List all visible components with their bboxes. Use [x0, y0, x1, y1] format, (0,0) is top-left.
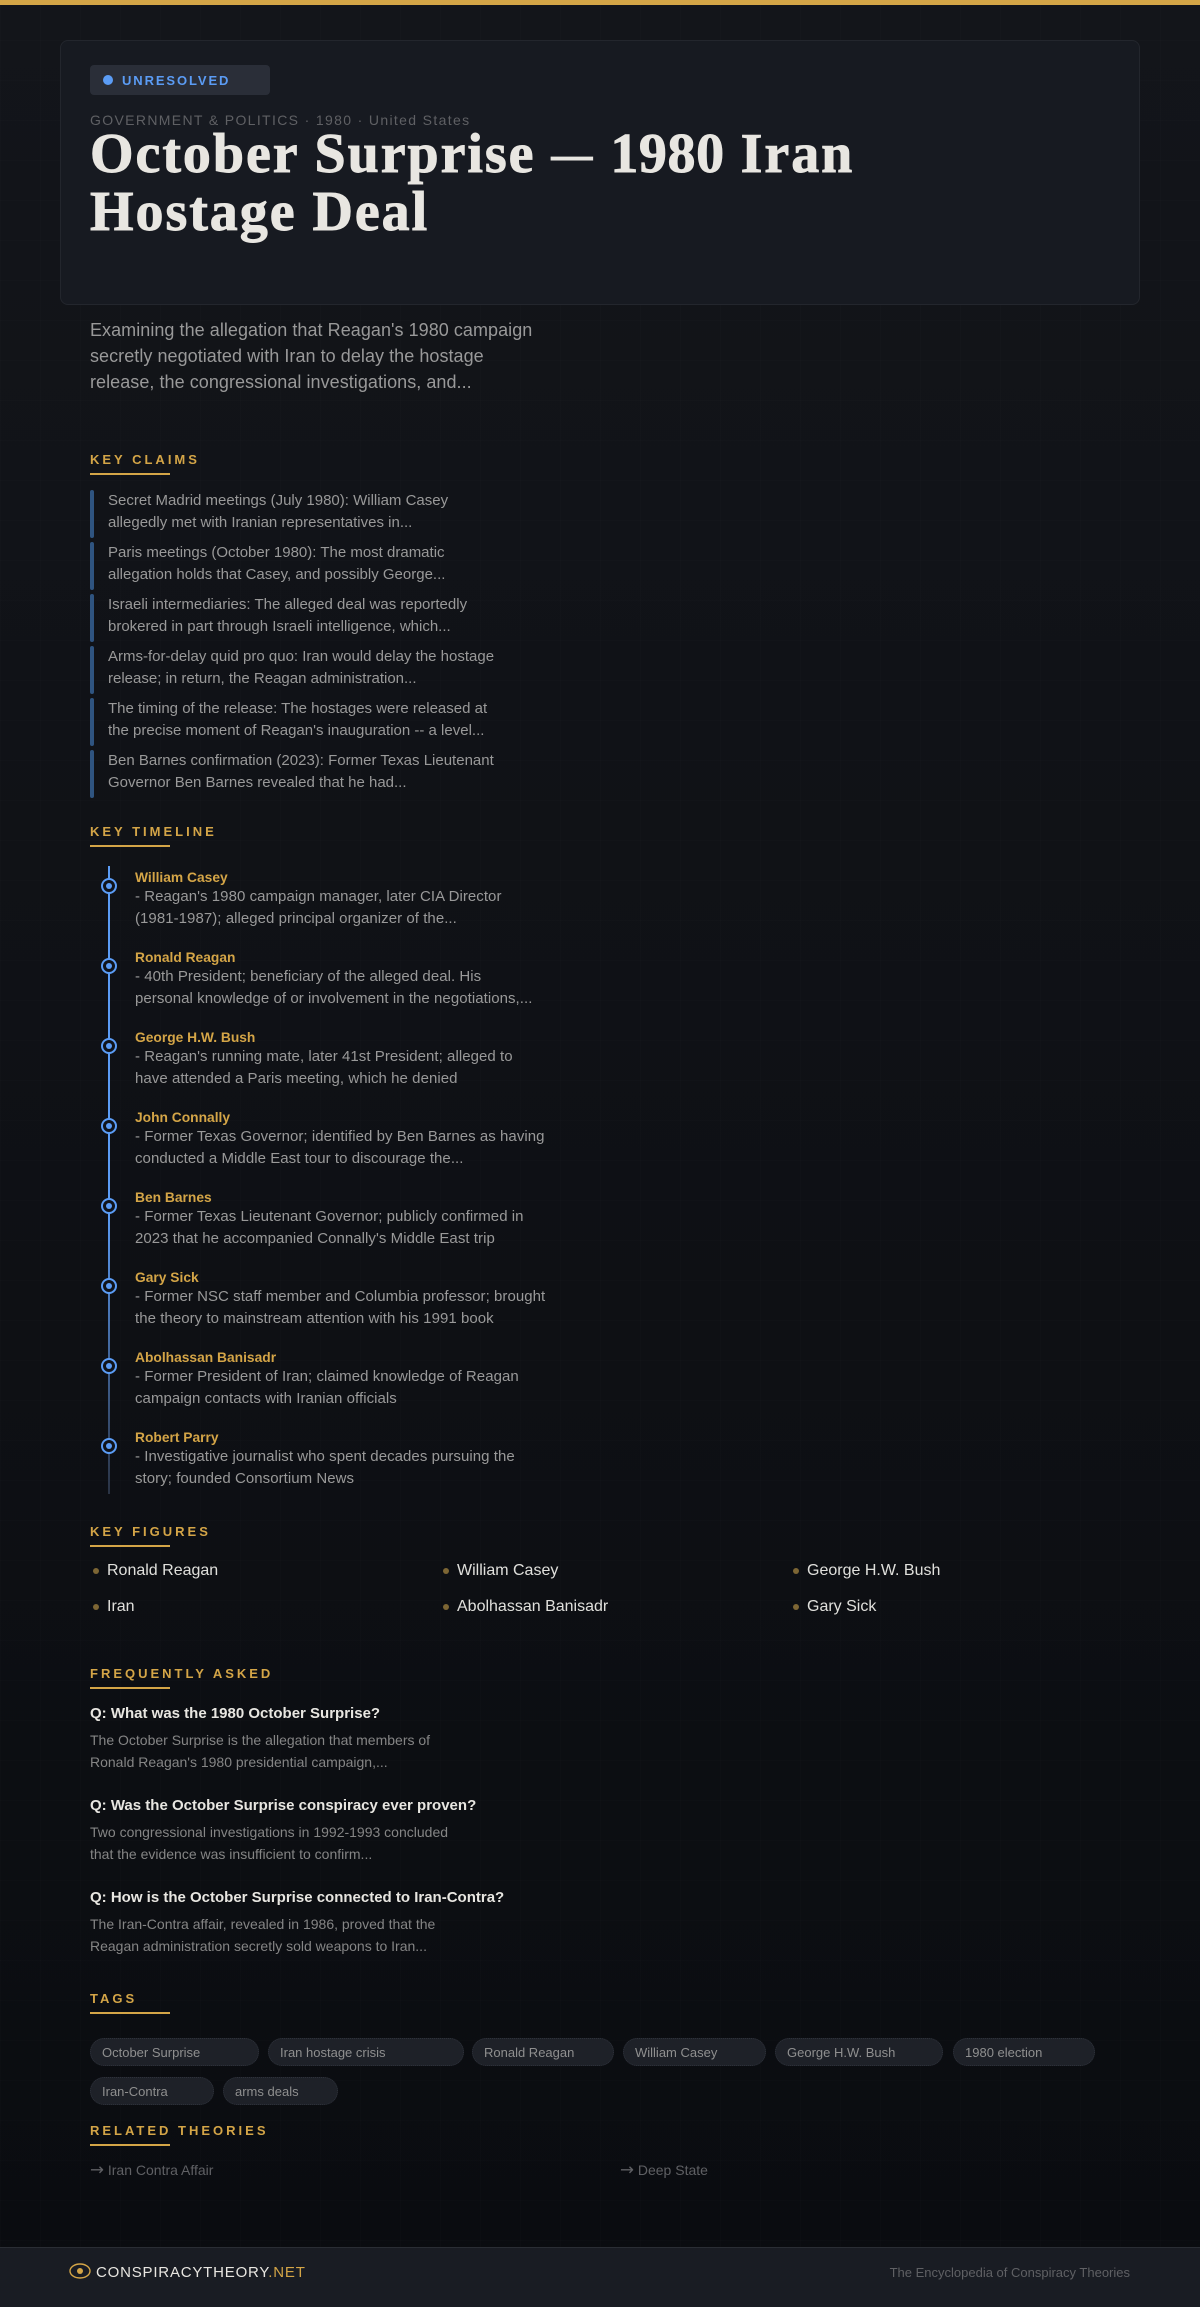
- tag: William Casey: [635, 2045, 717, 2060]
- heading: key timeline: KEY TIMELINE: [90, 824, 217, 839]
- timeline item: Abolhassan Banisadr: Abolhassan Banisadr: [135, 1350, 276, 1365]
- FAQ 3: [90, 1889, 504, 1954]
- icon: eye logo: [69, 2263, 91, 2279]
- claim 3: Israeli intermediaries: The alleged deal was reportedly: [108, 596, 467, 613]
- top accent bar: [0, 0, 1200, 5]
- panel: key figures: [93, 1562, 940, 1615]
- FAQ 1: The October Surprise is the allegation that members of: [90, 1732, 430, 1748]
- FAQ 2: [90, 1797, 476, 1862]
- badge label: UNRESOLVED: [122, 73, 230, 88]
- footer: [0, 2247, 1200, 2307]
- claim 6: Ben Barnes confirmation (2023): Former Texas Lieutenant: [108, 752, 494, 769]
- claim 3: brokered in part through Israeli intelligence, which...: [108, 618, 451, 635]
- claim 1: Secret Madrid meetings (July 1980): William Casey: [108, 492, 448, 509]
- tag: [775, 2038, 943, 2066]
- timeline item: William Casey: (1981-1987); alleged principal organizer of the...: [135, 910, 457, 927]
- claim 1: [90, 490, 448, 538]
- tag: [268, 2038, 464, 2066]
- related link: Iran Contra Affair: → Iran Contra Affair: [90, 2159, 213, 2179]
- claim 4: Arms-for-delay quid pro quo: Iran would delay the hostage: [108, 648, 494, 665]
- timeline item: George H.W. Bush: [101, 1030, 513, 1087]
- timeline item: Ben Barnes: [101, 1190, 524, 1247]
- timeline item: Gary Sick: [101, 1270, 546, 1327]
- tag: [90, 2077, 214, 2105]
- intro text: [90, 320, 532, 392]
- heading: tags: TAGS: [90, 1991, 137, 2006]
- intro text: secretly negotiated with Iran to delay the hostage: [90, 346, 484, 366]
- title: [90, 123, 854, 243]
- FAQ 2: Two congressional investigations in 1992-1993 concluded: [90, 1824, 448, 1840]
- heading: key figures: KEY FIGURES: [90, 1524, 211, 1539]
- FAQ 1: Q: What was the 1980 October Surprise?: [90, 1705, 380, 1722]
- tag: 1980 election: [965, 2045, 1042, 2060]
- tag: George H.W. Bush: [787, 2045, 895, 2060]
- timeline item: John Connally: John Connally: [135, 1110, 230, 1125]
- timeline item: William Casey: [101, 870, 502, 927]
- FAQ 3: The Iran-Contra affair, revealed in 1986, proved that the: [90, 1916, 435, 1932]
- claim 4: release; in return, the Reagan administration...: [108, 670, 417, 687]
- timeline item: Gary Sick: - Former NSC staff member and Columbia professor; brought: [135, 1288, 545, 1305]
- timeline item: George H.W. Bush: have attended a Paris meeting, which he denied: [135, 1070, 458, 1087]
- FAQ 3: Reagan administration secretly sold weapons to Iran...: [90, 1938, 427, 1954]
- timeline item: John Connally: - Former Texas Governor; identified by Ben Barnes as having: [135, 1128, 545, 1145]
- figure: Ronald Reagan: Ronald Reagan: [107, 1562, 218, 1579]
- tag: [223, 2077, 338, 2105]
- FAQ 1: [90, 1705, 430, 1770]
- claim 1: allegedly met with Iranian representatives in...: [108, 514, 412, 531]
- figure: Gary Sick: Gary Sick: [807, 1598, 876, 1615]
- related link: Deep State: → Deep State: [620, 2159, 708, 2179]
- claim 5: The timing of the release: The hostages were released at: [108, 700, 487, 717]
- timeline item: John Connally: conducted a Middle East tour to discourage the...: [135, 1150, 463, 1167]
- timeline item: Robert Parry: - Investigative journalist who spent decades pursuing the: [135, 1448, 515, 1465]
- panel: key claims list: [90, 490, 494, 798]
- timeline item: Ben Barnes: Ben Barnes: [135, 1190, 212, 1205]
- heading: related theories: RELATED THEORIES: [90, 2123, 268, 2138]
- tag: [623, 2038, 766, 2066]
- tag: arms deals: [235, 2084, 299, 2099]
- timeline axis: [108, 866, 110, 1494]
- FAQ 2: that the evidence was insufficient to confirm...: [90, 1846, 372, 1862]
- claim 5: [90, 698, 488, 746]
- claim 2: allegation holds that Casey, and possibly George...: [108, 566, 445, 583]
- panel: FAQ: [90, 1705, 504, 1954]
- tag: October Surprise: [102, 2045, 200, 2060]
- timeline item: Ben Barnes: 2023 that he accompanied Connally's Middle East trip: [135, 1230, 495, 1247]
- icon: status dot: [103, 75, 113, 85]
- intro text: release, the congressional investigations, and...: [90, 372, 472, 392]
- FAQ 1: Ronald Reagan's 1980 presidential campaign,...: [90, 1754, 388, 1770]
- tag: Iran hostage crisis: [280, 2045, 386, 2060]
- claim 6: Governor Ben Barnes revealed that he had...: [108, 774, 407, 791]
- timeline item: Robert Parry: Robert Parry: [135, 1430, 219, 1445]
- claim 5: the precise moment of Reagan's inauguration -- a level...: [108, 722, 484, 739]
- heading: key claims: KEY CLAIMS: [90, 452, 200, 467]
- FAQ 3: Q: How is the October Surprise connected to Iran-Contra?: [90, 1889, 504, 1906]
- timeline item: Ronald Reagan: [101, 950, 532, 1007]
- figure: Iran: [93, 1598, 135, 1615]
- title: Hostage Deal: [90, 181, 429, 243]
- tag: [472, 2038, 614, 2066]
- timeline item: Gary Sick: Gary Sick: [135, 1270, 199, 1285]
- tag: Ronald Reagan: [484, 2045, 574, 2060]
- figure: George H.W. Bush: George H.W. Bush: [807, 1562, 940, 1579]
- timeline item: Abolhassan Banisadr: - Former President of Iran; claimed knowledge of Reagan: [135, 1368, 519, 1385]
- claim 2: Paris meetings (October 1980): The most dramatic: [108, 544, 445, 561]
- FAQ 2: Q: Was the October Surprise conspiracy ever proven?: [90, 1797, 476, 1814]
- timeline item: Robert Parry: story; founded Consortium News: [135, 1470, 354, 1487]
- timeline item: William Casey: - Reagan's 1980 campaign manager, later CIA Director: [135, 888, 502, 905]
- panel: tags: [90, 2038, 1095, 2105]
- tag: Iran-Contra: [102, 2084, 168, 2099]
- panel: timeline: [101, 866, 546, 1494]
- status badge: [90, 65, 270, 95]
- figure: William Casey: William Casey: [457, 1562, 558, 1579]
- claim 3: [90, 594, 467, 642]
- timeline item: George H.W. Bush: George H.W. Bush: [135, 1030, 255, 1045]
- logo wordmark: CONSPIRACYTHEORY.NET: [96, 2264, 306, 2281]
- tag: [90, 2038, 259, 2066]
- figure: Abolhassan Banisadr: Abolhassan Banisadr: [457, 1598, 608, 1615]
- category line: GOVERNMENT & POLITICS · 1980 · United States: [90, 112, 470, 128]
- timeline item: John Connally: [101, 1110, 545, 1167]
- panel: header card: [60, 40, 1140, 305]
- timeline item: William Casey: William Casey: [135, 870, 228, 885]
- timeline item: Abolhassan Banisadr: [101, 1350, 519, 1407]
- timeline item: George H.W. Bush: - Reagan's running mate, later 41st President; alleged to: [135, 1048, 513, 1065]
- claim 6: [90, 750, 494, 798]
- heading: frequently asked: FREQUENTLY ASKED: [90, 1666, 273, 1681]
- tag: [953, 2038, 1095, 2066]
- figure: Iran: Iran: [107, 1598, 135, 1615]
- timeline item: Robert Parry: [101, 1430, 515, 1487]
- claim 2: [90, 542, 445, 590]
- intro text: Examining the allegation that Reagan's 1980 campaign: [90, 320, 532, 340]
- title: October Surprise — 1980 Iran: [90, 123, 854, 185]
- timeline item: Abolhassan Banisadr: campaign contacts with Iranian officials: [135, 1390, 397, 1407]
- timeline item: Gary Sick: the theory to mainstream attention with his 1991 book: [135, 1310, 494, 1327]
- timeline item: Ronald Reagan: - 40th President; beneficiary of the alleged deal. His: [135, 968, 481, 985]
- footer tagline: The Encyclopedia of Conspiracy Theories: [890, 2265, 1130, 2280]
- timeline item: Ronald Reagan: personal knowledge of or involvement in the negotiations,...: [135, 990, 532, 1007]
- claim 4: [90, 646, 494, 694]
- timeline item: Ronald Reagan: Ronald Reagan: [135, 950, 235, 965]
- timeline item: Ben Barnes: - Former Texas Lieutenant Governor; publicly confirmed in: [135, 1208, 524, 1225]
